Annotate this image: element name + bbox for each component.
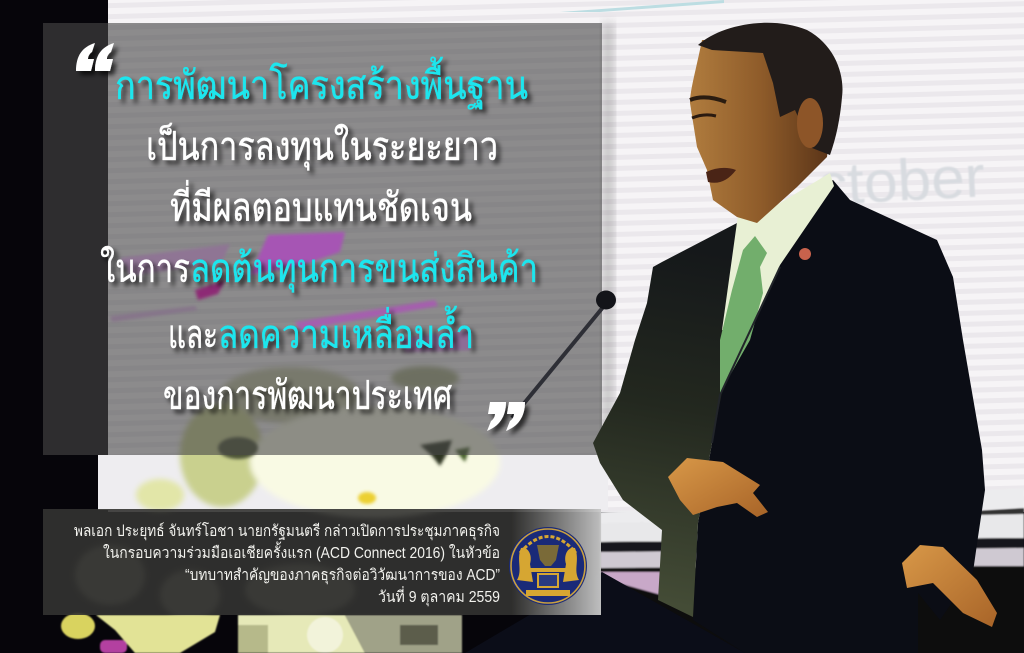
caption text: วันที่ 9 ตุลาคม 2559 xyxy=(378,586,500,607)
left sleeve and jacket side xyxy=(593,223,737,617)
right lapel edge xyxy=(712,267,780,443)
necktie xyxy=(720,236,767,393)
line 5 lead: และ xyxy=(168,313,218,357)
line 5 highlight: ลดความเหลื่อมล้ำ xyxy=(218,305,474,357)
magenta screen graphic xyxy=(110,232,470,352)
white bouquet xyxy=(250,406,500,518)
caption text: พลเอก ประยุทธ์ จันทร์โอชา นายกรัฐมนตรี กล่าวเปิดการประชุมภาคธุรกิจ xyxy=(74,522,500,541)
hydrangea xyxy=(180,403,264,507)
line 4 lead: ในการ xyxy=(100,245,190,291)
line 6: ของการพัฒนาประเทศ xyxy=(163,374,452,418)
seal base xyxy=(526,590,570,596)
flower arrangement xyxy=(61,366,500,653)
seal urn xyxy=(537,545,559,566)
lectern xyxy=(465,572,745,653)
closing quotation mark xyxy=(487,402,525,431)
hair xyxy=(698,23,843,155)
caption text: “บทบาทสำคัญของภาคธุรกิจต่อวิวัฒนาการของ ACD” xyxy=(185,567,500,585)
quote heading text xyxy=(76,43,538,431)
mouth xyxy=(706,168,736,183)
leafy top xyxy=(220,367,360,423)
neck and face xyxy=(690,40,830,223)
orchids behind caption xyxy=(75,545,145,605)
screen lettering: ctober xyxy=(815,144,986,218)
brow and eye xyxy=(690,97,726,102)
panel: caption xyxy=(43,509,601,615)
microphone xyxy=(512,290,616,418)
caption text: ในกรอบความร่วมมือเอเชียครั้งแรก (ACD Connect 2016) ในหัวข้อ xyxy=(103,541,500,562)
speaker: man at podium xyxy=(593,23,997,653)
lapel pin xyxy=(799,248,811,260)
ear xyxy=(797,98,823,148)
seal lions xyxy=(517,548,533,582)
shirt xyxy=(722,173,834,340)
line 1: การพัฒนาโครงสร้างพื้นฐาน xyxy=(115,56,528,110)
line 3: ที่มีผลตอบแทนชัดเจน xyxy=(170,180,472,230)
panel: quote background xyxy=(43,23,614,455)
caption text xyxy=(74,522,500,607)
orchids below caption xyxy=(61,613,462,653)
line 2: เป็นการลงทุนในระยะยาว xyxy=(146,122,498,171)
line 4 highlight: ลดต้นทุนการขนส่งสินค้า xyxy=(190,247,538,293)
icon: government seal xyxy=(509,527,587,605)
left hand xyxy=(902,545,997,627)
jacket front and right arm xyxy=(693,180,985,653)
lower screen bands xyxy=(600,488,1024,653)
opening quotation mark xyxy=(76,43,114,71)
right hand xyxy=(668,458,768,517)
seal arch ornament xyxy=(520,536,576,553)
